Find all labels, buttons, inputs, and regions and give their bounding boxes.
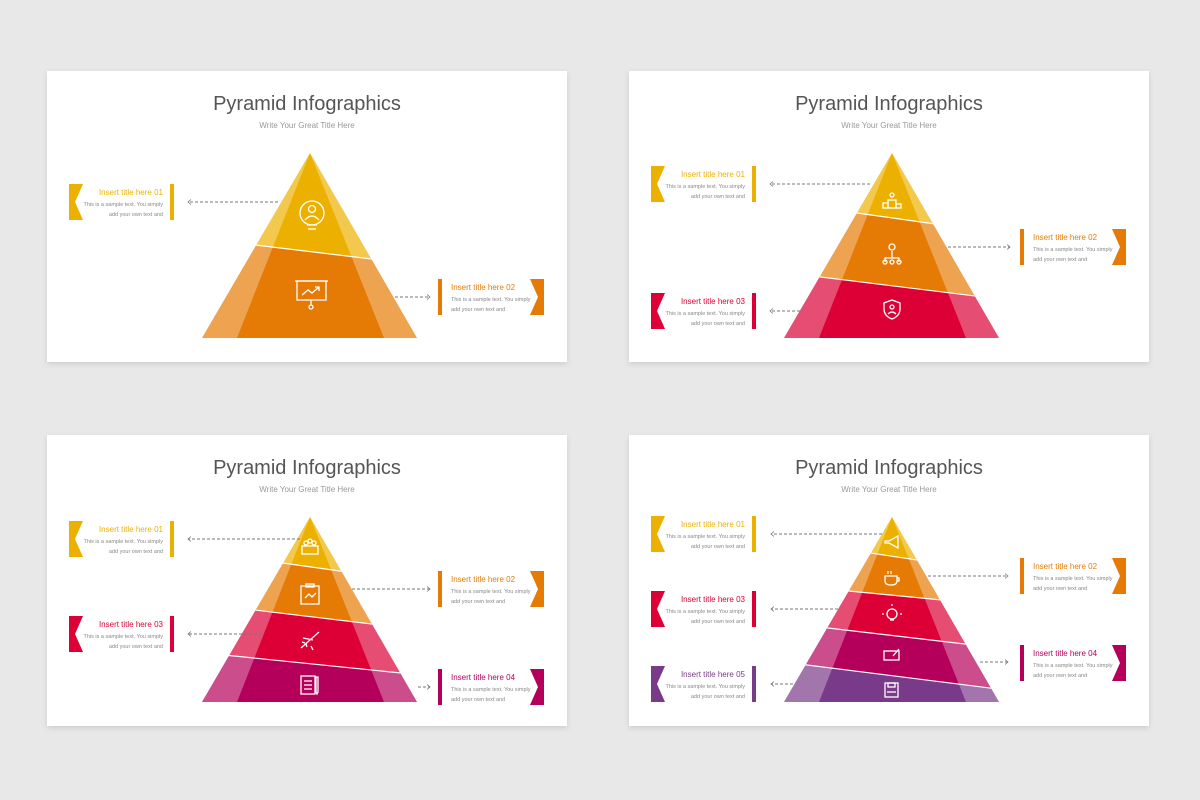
label 04: Insert title here 04 [1033,649,1098,658]
label 03: add your own text and [691,619,745,625]
label 02 [1020,558,1126,594]
icon: shield [884,300,900,319]
label 03 [69,616,174,652]
pyramid 4 [784,517,999,702]
subtitle: Write Your Great Title Here [259,121,355,130]
icon: presentation [295,281,328,309]
label 05: Insert title here 05 [681,670,746,679]
label 02 [438,571,544,607]
icon: bulb person [300,201,324,229]
label 01: add your own text and [109,549,163,555]
arrows [771,534,1008,684]
label 04: add your own text and [451,697,505,703]
icon: basket [302,539,318,554]
label 02: This is a sample text. You simply [451,589,531,595]
panel: card 1 [47,71,567,400]
label 02 [1020,229,1126,265]
title: Pyramid Infographics [795,457,983,479]
icon: plane [301,632,319,650]
label 04: This is a sample text. You simply [451,687,531,693]
label 04 [438,669,544,705]
label 01: This is a sample text. You simply [84,202,163,208]
pyramid 1 [202,153,417,338]
icon: podium [883,193,901,208]
arrow 2 [395,296,430,298]
label 01: Insert title here 01 [99,525,164,534]
label 02: add your own text and [1033,586,1087,592]
label 01: Insert title here 01 [681,170,746,179]
label 01: Insert title here 01 [99,188,164,197]
label 02: add your own text and [451,599,505,605]
label 03: Insert title here 03 [681,297,746,306]
label 01: Insert title here 01 [681,520,746,529]
label 01: add your own text and [109,212,163,218]
label 03: add your own text and [109,644,163,650]
label 02: This is a sample text. You simply [1033,247,1113,253]
label 03: This is a sample text. You simply [666,311,745,317]
label 01 [69,184,174,220]
arrows [188,539,430,687]
arrows [770,184,1010,311]
label 01: This is a sample text. You simply [666,184,745,190]
label 03 [651,293,756,329]
label 01: This is a sample text. You simply [84,539,163,545]
label 03 [651,591,756,627]
subtitle: Write Your Great Title Here [841,121,937,130]
icon: clipboard [301,584,319,604]
label 03: Insert title here 03 [99,620,164,629]
label 03: add your own text and [691,321,745,327]
icon: cheque [884,649,899,660]
label 04 [1020,645,1126,681]
panel: card 2 [629,71,1149,400]
icon: team [883,244,901,264]
icon: floppy [885,683,898,697]
label 03: This is a sample text. You simply [84,634,163,640]
subtitle: Write Your Great Title Here [841,485,937,494]
pyramid 2 [784,153,999,338]
label 05: This is a sample text. You simply [666,684,745,690]
label 04: add your own text and [1033,673,1087,679]
label 01: This is a sample text. You simply [666,534,745,540]
label 02 [438,279,544,315]
label 02: add your own text and [451,307,505,313]
label 01 [69,521,174,557]
icon: megaphone [885,536,898,548]
icon: cup [885,571,899,585]
label 02: add your own text and [1033,257,1087,263]
title: Pyramid Infographics [213,93,401,115]
subtitle: Write Your Great Title Here [259,485,355,494]
title: Pyramid Infographics [795,93,983,115]
icon: money bulb [882,604,902,620]
label 03: Insert title here 03 [681,595,746,604]
label 02: Insert title here 02 [1033,233,1098,242]
label 02: This is a sample text. You simply [1033,576,1113,582]
label 01: add your own text and [691,194,745,200]
label 02: Insert title here 02 [451,283,516,292]
label 01 [651,166,756,202]
label 04: This is a sample text. You simply [1033,663,1113,669]
arrow 1 [188,201,278,203]
label 01 [651,516,756,552]
label 02: Insert title here 02 [451,575,516,584]
icon: document [301,676,318,694]
panel: card 4 [629,435,1149,760]
label 02: Insert title here 02 [1033,562,1098,571]
label 05 [651,666,756,702]
label 03: This is a sample text. You simply [666,609,745,615]
panel: card 3 [47,435,567,760]
label 04: Insert title here 04 [451,673,516,682]
pyramid 3 [202,517,417,702]
label 05: add your own text and [691,694,745,700]
label 02: This is a sample text. You simply [451,297,531,303]
label 01: add your own text and [691,544,745,550]
title: Pyramid Infographics [213,457,401,479]
